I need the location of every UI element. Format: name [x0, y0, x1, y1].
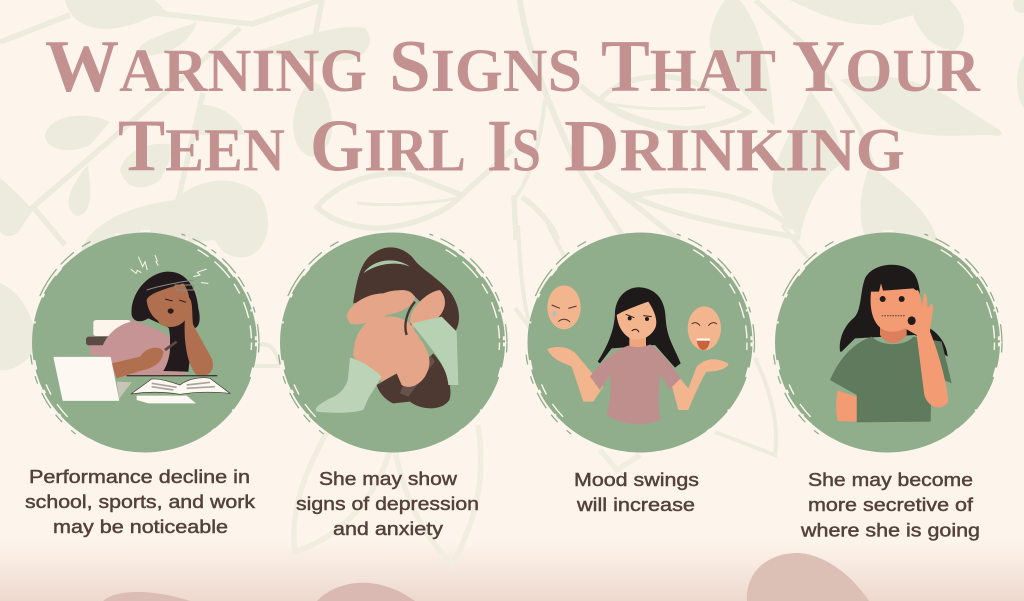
- title: YOUR: [792, 26, 981, 108]
- caption 2: and anxiety: [333, 519, 443, 539]
- bottom decorative blobs: [103, 553, 869, 601]
- green brush circle 4: [773, 228, 1002, 457]
- green brush circle 2: [278, 228, 507, 457]
- panel: performance decline: [25, 228, 259, 537]
- caption 1: school, sports, and work: [25, 492, 256, 512]
- illustration: tired girl studying at desk: [54, 255, 230, 403]
- bottom gradient band: [0, 540, 1024, 601]
- title: SIGNS: [389, 26, 582, 108]
- caption 1: Performance decline in: [29, 467, 250, 487]
- caption 2: [296, 469, 479, 539]
- title: GIRL: [310, 106, 466, 188]
- icon: happy mask: [688, 306, 721, 350]
- caption 3: will increase: [576, 495, 695, 515]
- panel: mood swings: [526, 228, 754, 515]
- title: WARNING: [45, 26, 367, 108]
- caption 2: signs of depression: [296, 494, 479, 514]
- caption 4: more secretive of: [808, 495, 974, 515]
- caption 4: where she is going: [800, 520, 980, 540]
- caption 4: [800, 470, 980, 540]
- panel: depression and anxiety: [278, 228, 507, 539]
- caption 3: [574, 470, 699, 515]
- caption 4: She may become: [808, 470, 973, 490]
- caption 1: may be noticeable: [53, 517, 228, 537]
- panel: secretive: [773, 228, 1002, 540]
- green brush circle 3: [526, 228, 754, 457]
- title: IS: [487, 106, 541, 188]
- title: DRINKING: [564, 106, 905, 188]
- caption 3: Mood swings: [574, 470, 699, 490]
- illustration: girl shrugging with two masks: [547, 285, 728, 424]
- title: THAT: [601, 26, 776, 108]
- title: [45, 26, 981, 188]
- caption 2: She may show: [319, 469, 458, 489]
- title: TEEN: [118, 106, 285, 188]
- green brush circle 1: [30, 228, 259, 457]
- caption 1: [25, 467, 256, 537]
- illustration: girl hugging knees: [316, 247, 459, 413]
- icon: sad mask: [547, 285, 581, 329]
- illustration: girl zipping her lips: [830, 265, 952, 422]
